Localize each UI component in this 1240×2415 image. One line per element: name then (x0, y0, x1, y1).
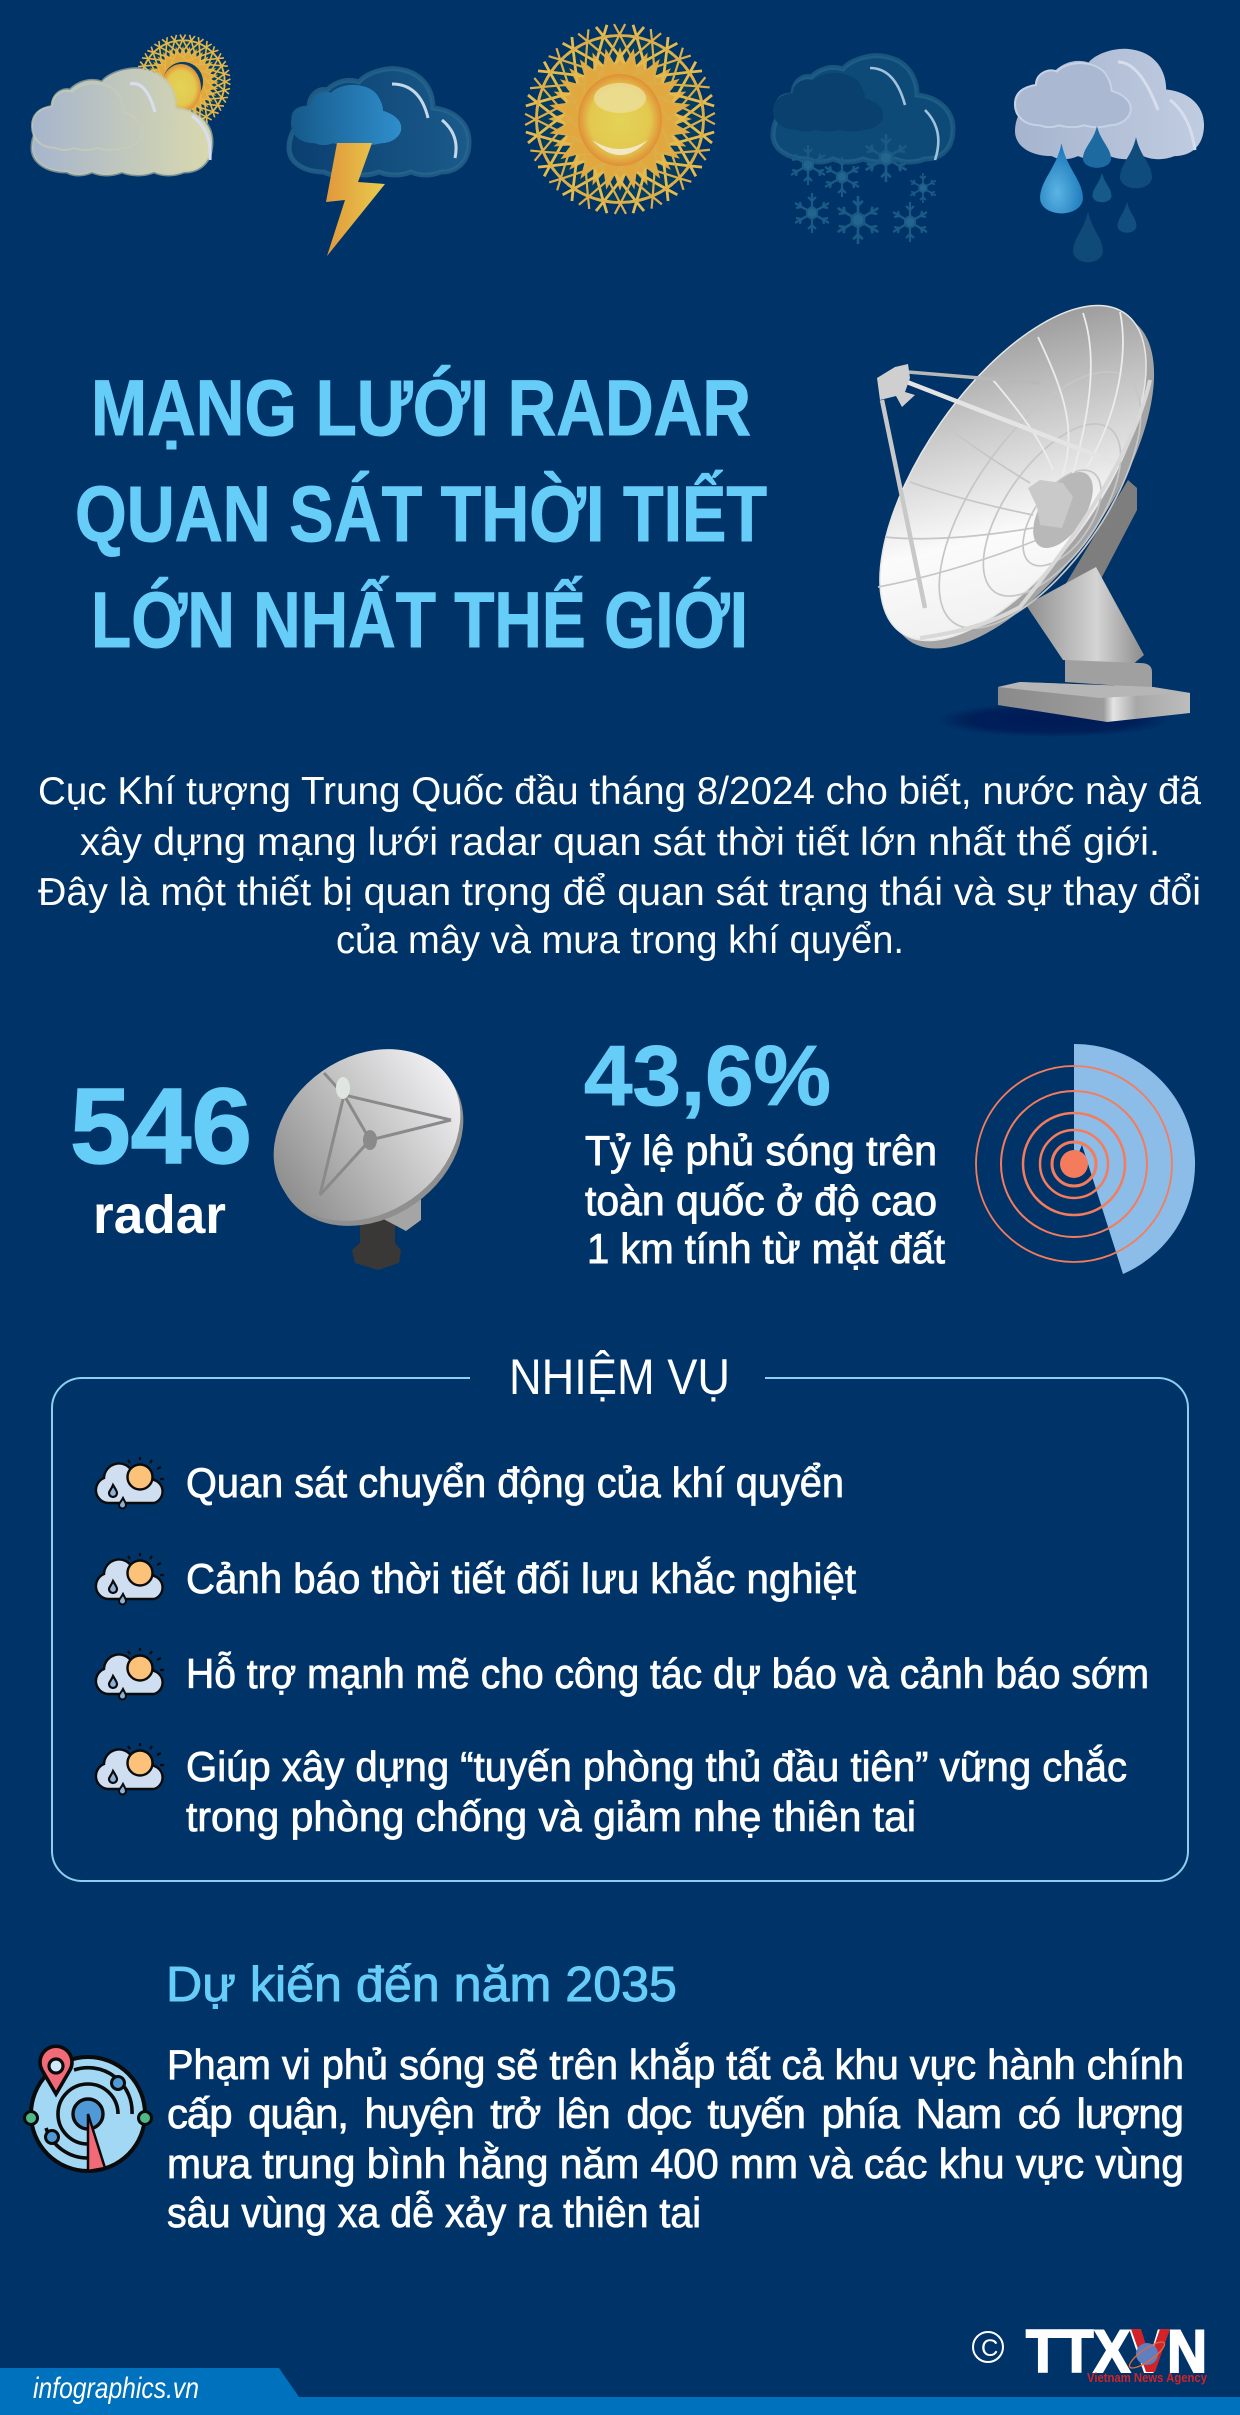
icon: cloud and sun 3 (96, 1648, 164, 1700)
intro text: xây dựng mạng lưới radar quan sát thời tiết lớn nhất thế giới. (80, 821, 1160, 864)
text: 2035 forecast paragraph: cấp quận, huyện trở lên dọc tuyến phía Nam có lượng (167, 2090, 1184, 2137)
text: 2035 forecast paragraph: Phạm vi phủ sóng sẽ trên khắp tất cả khu vực hành chính (167, 2041, 1184, 2088)
intro text: của mây và mưa trong khí quyển. (336, 919, 904, 962)
icon: cloud and sun 1 (96, 1457, 164, 1508)
stat: 546 radar: 546 (70, 1065, 252, 1186)
title: QUAN SÁT THỜI TIẾT (75, 469, 767, 558)
icon: radar with location pin (24, 2046, 152, 2171)
icon: cloud and sun 2 (96, 1553, 164, 1604)
icon: bright sun (510, 9, 730, 229)
footer: website: infographics.vn (33, 2372, 199, 2405)
footer: blue band (0, 2368, 1240, 2415)
logo: TTXVN: TTXVN (1026, 2318, 1207, 2385)
icon: rain cloud (1015, 49, 1204, 262)
title (75, 363, 767, 664)
stat: 43,6% coverage: 1 km tính từ mặt đất (587, 1225, 945, 1272)
text: 2035 forecast paragraph: mưa trung bình hằng năm 400 mm và các khu vực vùng (167, 2140, 1184, 2187)
title: MẠNG LƯỚI RADAR (91, 363, 751, 452)
icon: storm cloud with lightning (289, 69, 469, 256)
stat: 43,6% coverage: toàn quốc ở độ cao (585, 1177, 937, 1224)
stat: 43,6% coverage: Tỷ lệ phủ sóng trên (585, 1127, 937, 1174)
mission 4 (186, 1743, 1127, 1840)
icon: cloud and sun 4 (96, 1743, 164, 1794)
stat: 43,6% coverage (584, 1029, 945, 1272)
stat: 546 radar (70, 1065, 252, 1245)
icon: snow cloud (773, 56, 953, 244)
icon: small dish (240, 1014, 497, 1270)
heading: by 2035: Dự kiến đến năm 2035 (166, 1958, 677, 2012)
mission 4: trong phòng chống và giảm nhẹ thiên tai (186, 1793, 916, 1840)
mission 1: Quan sát chuyển động của khí quyển (186, 1459, 844, 1506)
logo: TTXVN: Vietnam News Agency (1087, 2370, 1208, 2385)
mission 4: Giúp xây dựng “tuyến phòng thủ đầu tiên” vững chắc (186, 1743, 1127, 1790)
chart: radar coverage sector (976, 1044, 1195, 1274)
mission 3: Hỗ trợ mạnh mẽ cho công tác dự báo và cảnh báo sớm (186, 1650, 1149, 1697)
mission 2: Cảnh báo thời tiết đối lưu khắc nghiệt (186, 1555, 856, 1602)
title: LỚN NHẤT THẾ GIỚI (91, 575, 748, 664)
stat: 546 radar: radar (93, 1185, 226, 1245)
stat: 43,6% coverage: 43,6% (584, 1029, 831, 1124)
text: 2035 forecast paragraph: sâu vùng xa dễ xảy ra thiên tai (167, 2189, 701, 2236)
icon: sun behind cloud (32, 27, 238, 175)
intro text (38, 770, 1201, 962)
illustration: large satellite dish (829, 263, 1205, 737)
intro text: Cục Khí tượng Trung Quốc đầu tháng 8/2024 cho biết, nước này đã (38, 770, 1201, 813)
logo: TTXVN: C (981, 2335, 998, 2362)
text: 2035 forecast paragraph (167, 2041, 1184, 2236)
panel: missions (52, 1349, 1188, 1881)
heading: missions: NHIỆM VỤ (509, 1349, 730, 1405)
intro text: Đây là một thiết bị quan trọng để quan sát trạng thái và sự thay đổi (38, 871, 1201, 914)
